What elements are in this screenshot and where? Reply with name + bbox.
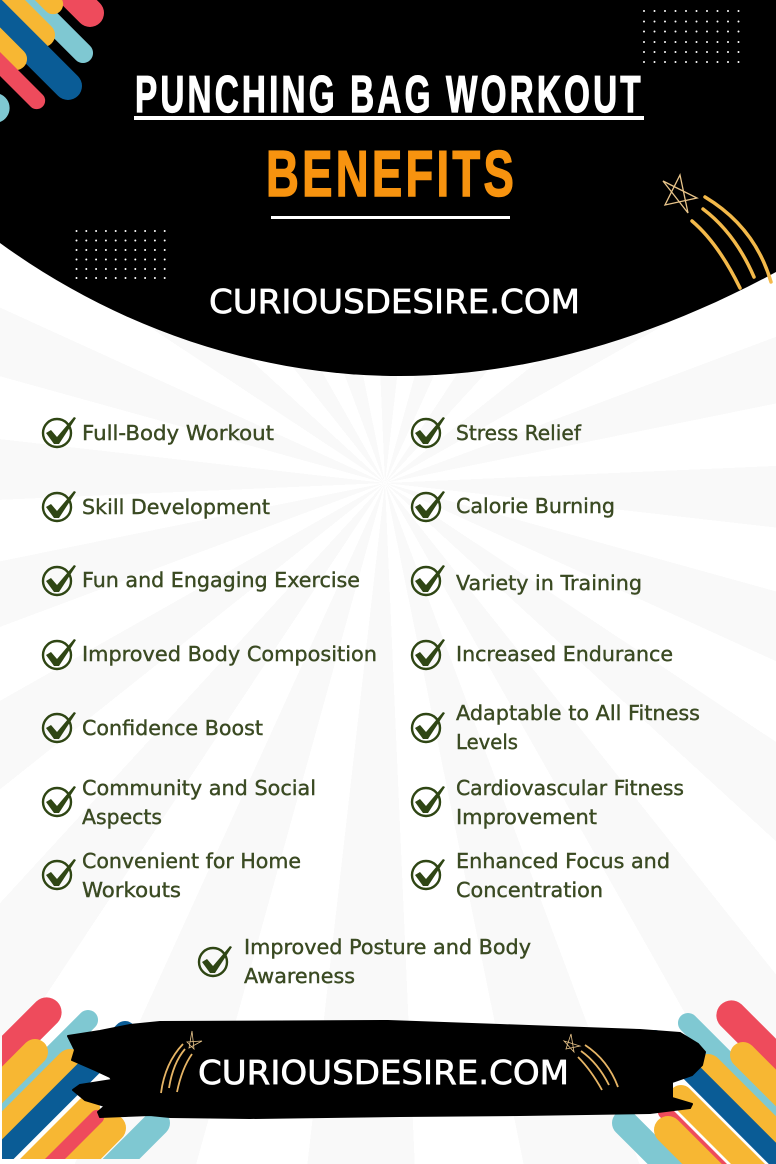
item: confidence boost: Confidence Boost (82, 716, 263, 740)
bottom-right colour stripes (612, 1000, 776, 1164)
item: adaptable to all fitness levels: Adaptable to All Fitness (456, 701, 700, 725)
item: improved posture and body awareness (199, 935, 531, 988)
item: calorie burning (412, 491, 615, 521)
item: increased endurance (412, 639, 673, 669)
item: enhanced focus and concentration (412, 849, 670, 902)
title: PUNCHING BAG WORKOUT (135, 66, 641, 124)
item: improved posture and body awareness: Improved Posture and Body (244, 935, 531, 959)
item: variety in training (412, 565, 642, 595)
top-left colour stripes (0, 0, 104, 122)
bottom-left colour stripes (2, 997, 170, 1159)
item: community and social aspects: Community and Social (82, 776, 316, 800)
item: stress relief: Stress Relief (456, 421, 582, 445)
item: full-body workout (43, 417, 274, 447)
item: skill development: Skill Development (82, 495, 270, 519)
benefits list: left column (43, 417, 377, 902)
item: convenient for home workouts: Convenient for Home (82, 849, 301, 873)
item: improved body composition (43, 639, 377, 669)
item: skill development (43, 491, 270, 521)
item: cardiovascular fitness improvement (412, 776, 684, 829)
subtitle: benefits: BENEFITS (266, 137, 514, 210)
item: enhanced focus and concentration: Enhanced Focus and (456, 849, 670, 873)
website name: banner: CURIOUSDESIRE.COM (198, 1053, 569, 1092)
black header panel (0, 0, 776, 376)
dot grid: top right (644, 11, 744, 62)
black brush banner (68, 1021, 705, 1118)
item: stress relief (412, 417, 582, 447)
item: enhanced focus and concentration: Concentration (456, 878, 603, 902)
item: confidence boost (43, 712, 263, 742)
item: fun and engaging exercise: Fun and Engaging Exercise (82, 568, 360, 592)
icon: shooting star banner right (564, 1034, 618, 1090)
benefits list: right column (412, 417, 700, 902)
item: convenient for home workouts (43, 849, 301, 902)
item: improved posture and body awareness: Awareness (244, 964, 355, 988)
item: convenient for home workouts: Workouts (82, 878, 181, 902)
item: cardiovascular fitness improvement: Improvement (456, 805, 597, 829)
dot grid: left (76, 231, 168, 278)
item: community and social aspects: Aspects (82, 805, 162, 829)
item: fun and engaging exercise (43, 565, 360, 595)
item: improved body composition: Improved Body Composition (82, 642, 377, 666)
icon: shooting star banner left (161, 1031, 202, 1093)
item: adaptable to all fitness levels (412, 701, 700, 754)
item: community and social aspects (43, 776, 316, 829)
item: calorie burning: Calorie Burning (456, 494, 615, 518)
website name: header: CURIOUSDESIRE.COM (209, 282, 580, 321)
item: full-body workout: Full-Body Workout (82, 421, 274, 445)
item: increased endurance: Increased Endurance (456, 642, 673, 666)
item: cardiovascular fitness improvement: Cardiovascular Fitness (456, 776, 684, 800)
item: adaptable to all fitness levels: Levels (456, 730, 518, 754)
item: variety in training: Variety in Training (456, 571, 642, 595)
icon: shooting star top right (663, 175, 771, 288)
